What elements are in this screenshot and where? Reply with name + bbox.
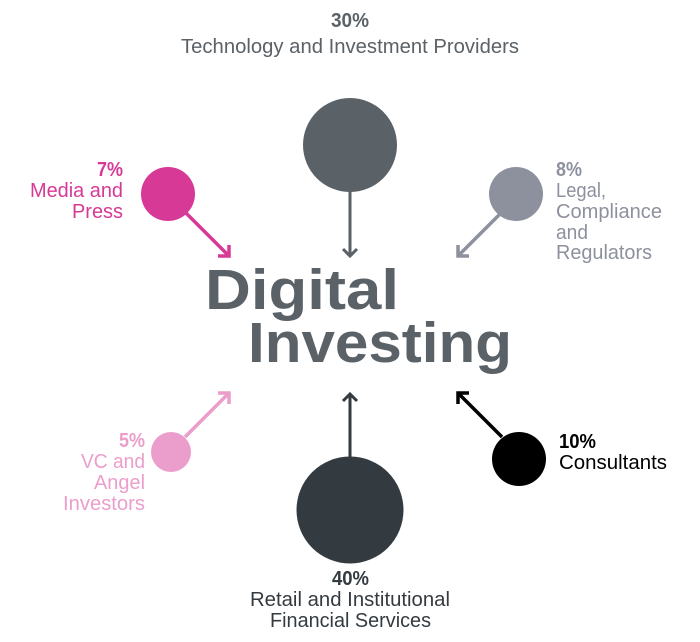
label: technology 30% bbox=[181, 9, 519, 58]
label: retail 40% bbox=[250, 567, 450, 632]
node: media bbox=[141, 167, 229, 256]
title: Investing bbox=[248, 311, 512, 375]
label: media 7% bbox=[30, 158, 123, 223]
node: legal bbox=[458, 167, 543, 256]
label: legal 8% bbox=[556, 158, 662, 264]
label: retail 40%: Financial Services bbox=[270, 609, 431, 632]
label: vc 5%: 5% bbox=[119, 429, 145, 452]
label: legal 8%: Regulators bbox=[556, 241, 652, 264]
node: consultants bbox=[458, 393, 546, 486]
label: consultants 10% bbox=[559, 430, 667, 474]
label: vc 5% bbox=[63, 429, 145, 515]
label: technology 30%: Technology and Investment Providers bbox=[181, 35, 519, 58]
label: media 7%: 7% bbox=[97, 158, 123, 181]
title: Digital bbox=[205, 258, 399, 322]
label: legal 8%: and bbox=[556, 221, 588, 244]
label: consultants 10%: 10% bbox=[559, 430, 596, 453]
label: legal 8%: Legal, bbox=[556, 179, 606, 202]
label: vc 5%: VC and bbox=[81, 450, 145, 473]
label: vc 5%: Angel bbox=[94, 471, 145, 494]
label: vc 5%: Investors bbox=[63, 492, 145, 515]
title bbox=[205, 258, 512, 375]
label: media 7%: Media and bbox=[30, 179, 123, 202]
label: media 7%: Press bbox=[72, 200, 123, 223]
node: technology bbox=[303, 98, 397, 256]
label: retail 40%: Retail and Institutional bbox=[250, 588, 450, 611]
label: legal 8%: Compliance bbox=[556, 200, 662, 223]
node: retail bbox=[296, 394, 404, 564]
label: consultants 10%: Consultants bbox=[559, 451, 667, 474]
label: legal 8%: 8% bbox=[556, 158, 582, 181]
label: technology 30%: 30% bbox=[331, 9, 369, 32]
label: retail 40%: 40% bbox=[332, 567, 369, 590]
node: vc bbox=[151, 393, 229, 472]
